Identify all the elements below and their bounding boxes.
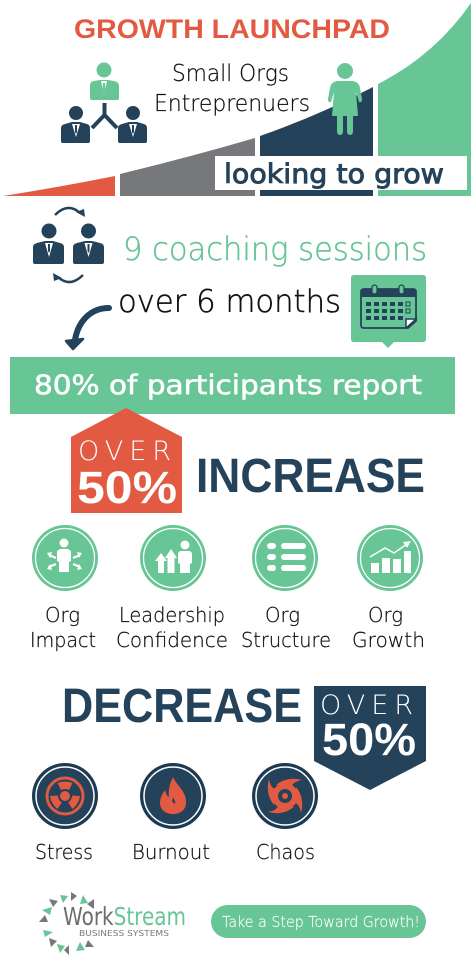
labels: increase categories: Org	[265, 603, 300, 627]
looking to grow label: looking to grow	[224, 159, 444, 190]
labels: increase categories: Org	[45, 603, 80, 627]
heading: over 6 months: over 6 months	[118, 284, 341, 320]
labels: increase categories: Structure	[241, 628, 331, 652]
heading: 9 coaching sessions: 9 coaching sessions	[123, 230, 427, 268]
icon: org growth	[357, 525, 423, 591]
labels: increase categories: Leadership	[119, 603, 225, 627]
labels: increase categories: Org	[368, 603, 403, 627]
icon: team of three people	[61, 62, 147, 143]
band: 80% of participants report: 80% of participants report	[34, 370, 422, 401]
button: take a step toward growth	[211, 905, 426, 938]
audience text: Small Orgs	[172, 61, 289, 87]
icon: stress	[32, 763, 98, 829]
badge: over 50% increase	[71, 408, 182, 513]
icon: burnout flame	[140, 763, 206, 829]
labels: decrease categories: Stress	[35, 840, 93, 864]
logo: WorkStream Business Systems: WorkStream	[63, 902, 186, 931]
labels: increase categories: Impact	[30, 628, 96, 652]
title: GROWTH LAUNCHPAD	[74, 14, 390, 44]
logo: WorkStream Business Systems	[39, 892, 186, 955]
badge: over 50% decrease: 50%	[322, 714, 416, 765]
growth curve chart	[3, 3, 471, 196]
labels: decrease categories	[35, 840, 315, 864]
audience text: Entreprenuers	[154, 91, 310, 117]
audience text	[154, 61, 310, 117]
labels: decrease categories: Chaos	[256, 840, 315, 864]
badge: over 50% increase: OVER	[78, 436, 171, 467]
labels: decrease categories: Burnout	[132, 840, 210, 864]
arrow: curved down to band	[66, 308, 109, 349]
badge: over 50% decrease	[314, 686, 426, 790]
badge: over 50% decrease: OVER	[320, 690, 413, 721]
labels: increase categories: Confidence	[116, 628, 228, 652]
band: 80% of participants report	[10, 357, 455, 414]
icon: chaos cyclone	[252, 763, 318, 829]
heading: decrease: DECREASE	[62, 680, 302, 733]
icon: calendar	[351, 275, 426, 348]
icon: org impact	[32, 525, 98, 591]
logo: WorkStream Business Systems: BUSINESS SYSTEMS	[79, 929, 169, 938]
icon: woman	[328, 63, 362, 135]
labels: increase categories: Growth	[352, 628, 425, 652]
icon: org structure	[252, 525, 318, 591]
labels: increase categories	[30, 603, 425, 652]
icon: coaching pair with arrows	[33, 208, 104, 282]
heading: increase: INCREASE	[196, 450, 425, 503]
badge: over 50% increase: 50%	[77, 462, 177, 513]
button: take a step toward growth: Take a Step Toward Growth!	[222, 913, 420, 931]
icon: leadership confidence	[140, 525, 206, 591]
